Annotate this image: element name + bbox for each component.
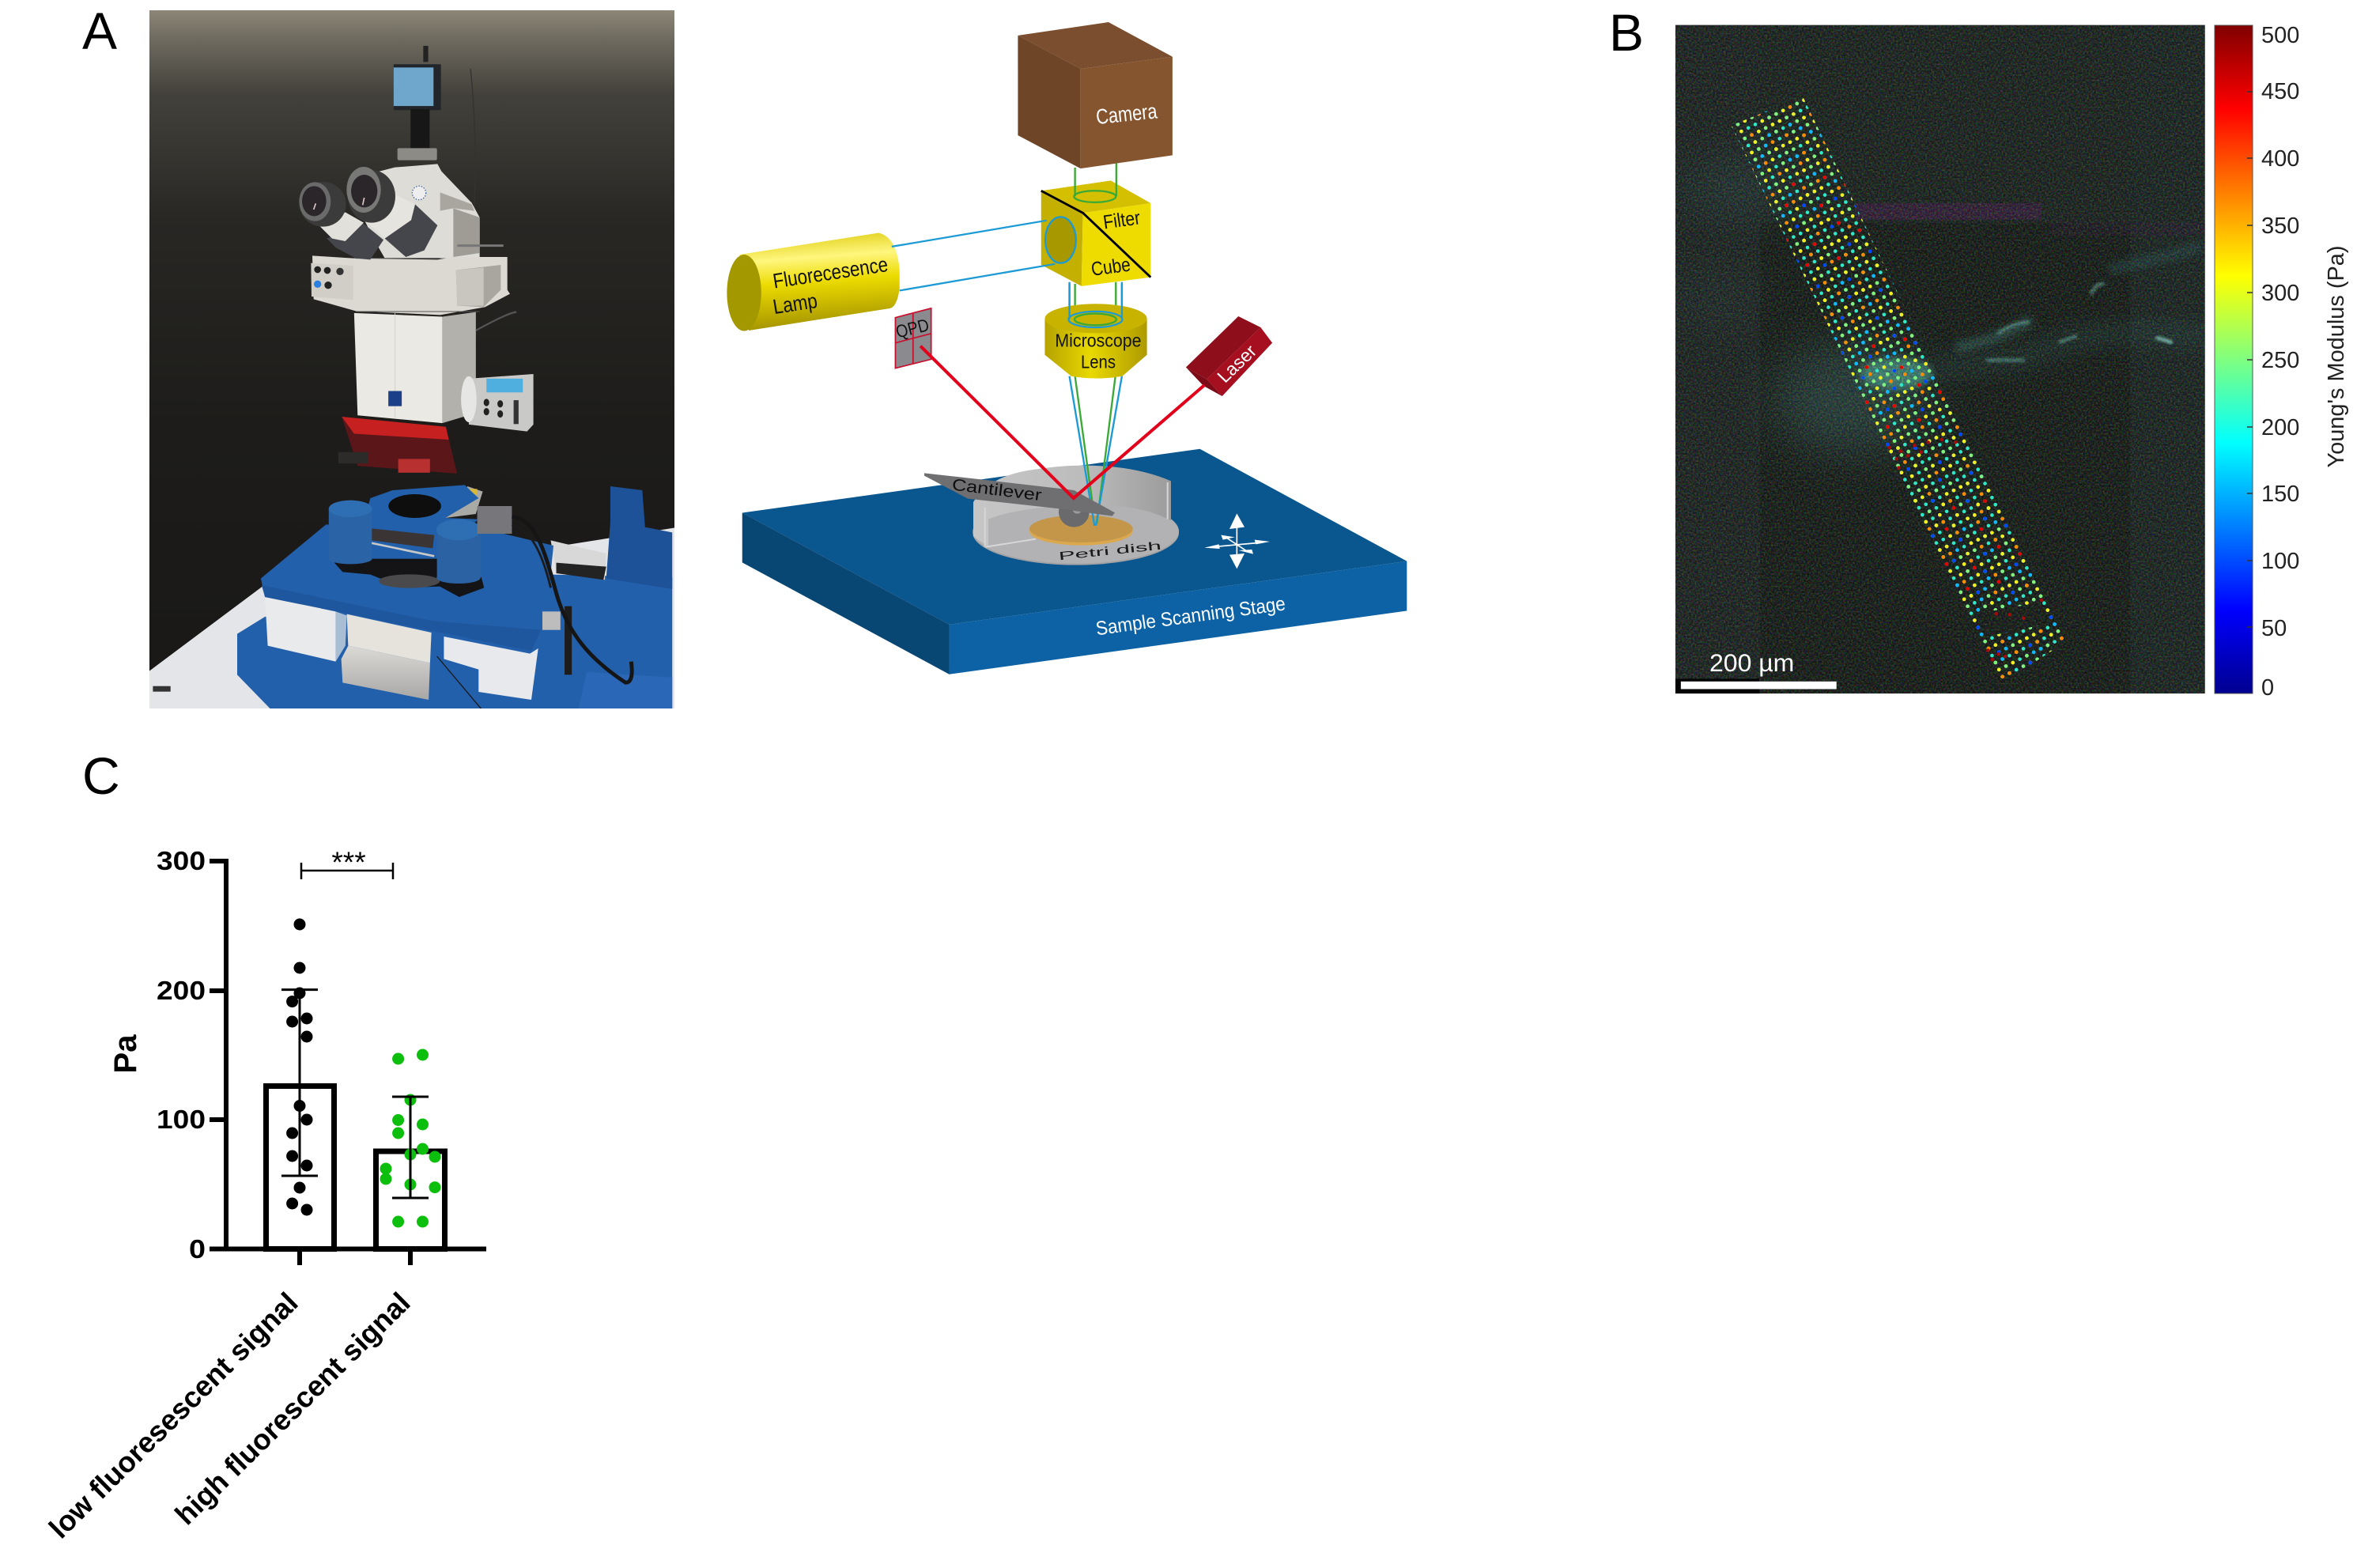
filter cube: Cube [1090,254,1132,281]
panel A: optical schematic of the setup [727,22,1407,674]
y axis tick labels: 200 [157,976,206,1005]
fluorescence lamp [727,233,900,331]
laser [1186,316,1272,396]
cantilever with probe sphere [924,473,1115,527]
indentation points coloured by stiffness [1732,98,2064,678]
microscope lens: Lens [1081,352,1116,372]
colour bar ticks [2247,92,2253,627]
y axis tick labels: 100 [157,1105,206,1134]
colour bar tick labels: 300 [2261,281,2299,306]
green emission light path [1075,163,1116,523]
quadrant photodiode [893,308,931,368]
bars [266,1086,444,1249]
significance bracket: *** [331,846,366,878]
scale bar [1681,649,1837,689]
colour bar tick labels: 50 [2261,616,2287,641]
colour bar: Young's modulus [2215,23,2349,701]
microscope lens [1044,284,1147,379]
panel label C: C [82,746,120,805]
panel C: bar chart of stiffness by fluorescence signal [43,846,486,1544]
panel label A: A [82,2,117,60]
sample disc [1029,515,1133,546]
error bars [281,990,429,1198]
colour bar tick labels: 400 [2261,146,2299,172]
fluorescence lamp: Lamp [771,289,819,319]
panel B: fluorescence image with stiffness map [1675,25,2205,694]
y axis tick labels [157,846,206,1264]
axes and ticks [210,859,486,1265]
y axis title: Pa [108,1034,143,1073]
colour bar tick labels: 100 [2261,549,2299,574]
low fluorescent data points [286,919,313,1216]
colour bar title: Young's Modulus (Pa) [2324,245,2349,468]
y axis tick labels: 300 [157,846,206,875]
motion arrows [1204,513,1270,569]
quadrant photodiode: QPD [893,315,931,342]
x axis labels: low fluoresescent signal [43,1287,304,1544]
sample scanning stage: Sample Scanning Stage [1094,593,1287,640]
x axis labels [43,1287,417,1544]
y axis tick labels: 0 [189,1234,206,1264]
colour bar tick labels [2261,23,2299,701]
panel label B: B [1609,3,1644,62]
scale bar: 200 µm [1709,649,1794,677]
colour bar tick labels: 200 [2261,415,2299,440]
sample scanning stage [742,449,1407,674]
petri dish [973,466,1179,565]
colour bar tick labels: 450 [2261,79,2299,104]
blue excitation light path [892,221,1122,526]
dark red band of stiff points [1888,438,2043,661]
microscope lens: Microscope [1055,331,1142,351]
high fluorescent data points [380,1048,441,1227]
panel A: photograph of the microscope setup [149,10,674,709]
fluorescence lamp: Fluorecesence [771,253,890,293]
colour bar tick labels: 350 [2261,213,2299,239]
laser: Laser [1213,341,1261,387]
filter cube [1041,180,1150,286]
camera [1018,22,1173,168]
colour bar tick labels: 0 [2261,675,2274,701]
petri dish: Petri dish [1058,540,1162,563]
red laser beam [920,346,1204,498]
camera: Camera [1095,99,1158,129]
significance bracket [301,846,393,879]
x axis labels: high fluorescent signal [168,1287,417,1531]
filter cube: Filter [1101,207,1142,233]
colour bar tick labels: 250 [2261,348,2299,373]
colour bar tick labels: 150 [2261,482,2299,507]
colour bar tick labels: 500 [2261,23,2299,48]
cantilever with probe sphere: Cantilever [951,475,1043,504]
